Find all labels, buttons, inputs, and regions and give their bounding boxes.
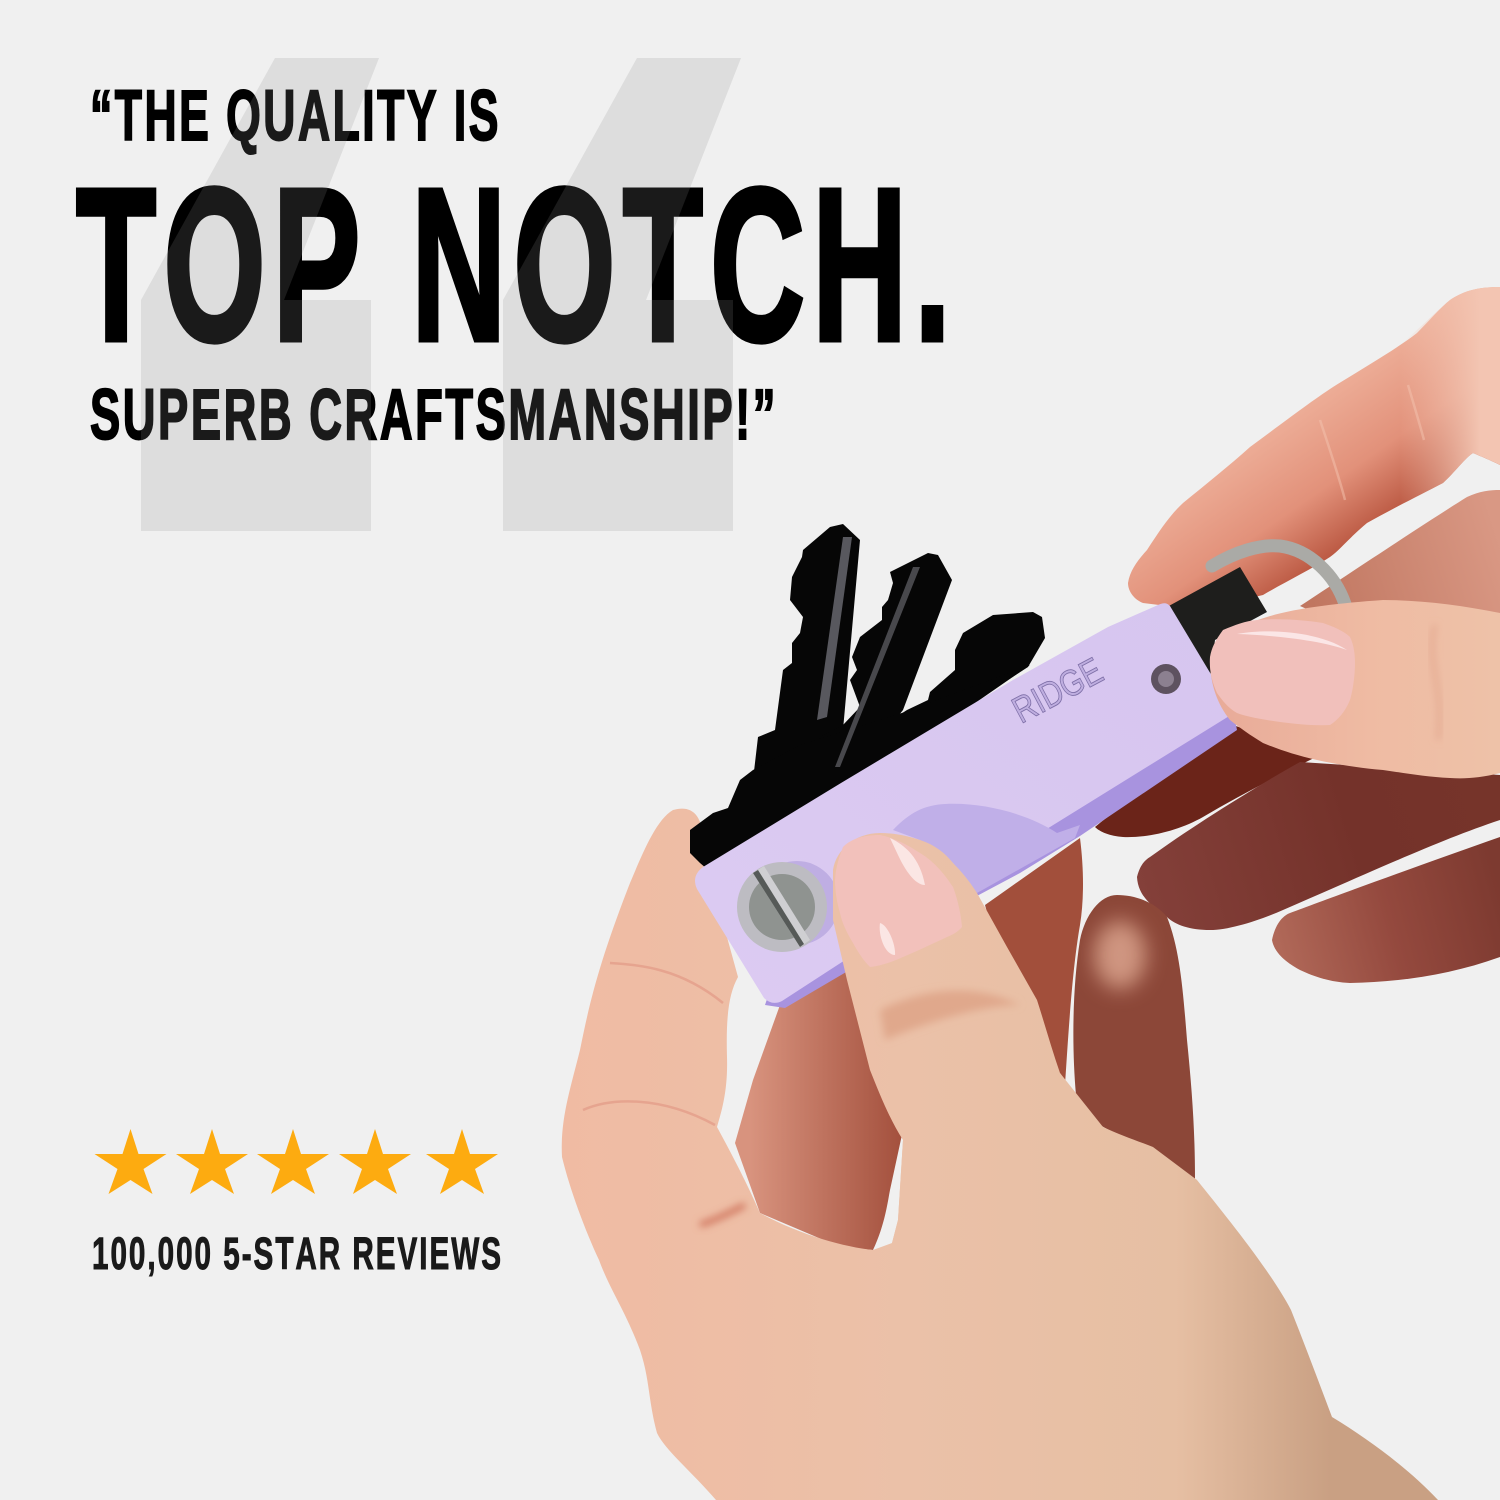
key three xyxy=(860,612,1045,750)
finger above thumb xyxy=(1300,490,1500,640)
finger C xyxy=(1272,837,1500,983)
thumb nail xyxy=(1210,619,1355,725)
headline quote xyxy=(76,77,958,455)
main screw xyxy=(737,862,827,952)
thumb nail xyxy=(835,835,962,967)
large quotation mark graphic xyxy=(141,58,741,531)
right hand index finger xyxy=(1128,287,1500,610)
review count caption: 100,000 5-STAR REVIEWS xyxy=(92,1228,503,1279)
photo: hands holding key organizer xyxy=(562,287,1500,1500)
lit fingertip xyxy=(1094,921,1146,989)
brand logo: RIDGE xyxy=(1006,650,1110,731)
knuckle shading xyxy=(880,991,1020,1040)
key bases xyxy=(690,665,1030,880)
left hand back fingers xyxy=(735,838,1195,1250)
thumb recess xyxy=(893,804,1080,893)
finger B xyxy=(1137,762,1500,930)
line: top notch: TOP NOTCH. xyxy=(76,144,958,387)
nail highlight xyxy=(1237,631,1347,650)
small screw xyxy=(1151,664,1181,694)
right hand thumb xyxy=(1210,600,1500,778)
screw recess xyxy=(755,861,839,945)
metal key ring xyxy=(1212,546,1345,604)
black keys xyxy=(690,524,1045,880)
right hand back fingers xyxy=(1095,490,1500,983)
finger D xyxy=(1073,895,1195,1180)
key blade highlights xyxy=(817,537,920,767)
left hand thumb xyxy=(833,833,1197,1300)
line: the quality is: “THE QUALITY IS xyxy=(90,77,501,156)
web crease xyxy=(700,1205,745,1225)
line: superb craftsmanship: SUPERB CRAFTSMANSHIP!” xyxy=(90,376,778,455)
left index creases xyxy=(583,963,723,1125)
purple organizer xyxy=(695,603,1237,1008)
knuckle creases xyxy=(1432,625,1440,740)
second finger xyxy=(735,960,903,1250)
finger E xyxy=(985,838,1083,1085)
index finger creases xyxy=(1320,385,1424,500)
organizer top plate xyxy=(695,603,1231,1003)
organizer side edge xyxy=(765,710,1237,1008)
nail highlight xyxy=(880,838,925,955)
left hand palm and index finger xyxy=(562,809,1438,1500)
key one xyxy=(753,524,860,800)
pale knuckle area xyxy=(1400,287,1500,505)
five star rating xyxy=(94,1129,498,1194)
key two xyxy=(817,553,952,770)
black strap xyxy=(1167,567,1267,692)
finger A xyxy=(1095,725,1320,837)
